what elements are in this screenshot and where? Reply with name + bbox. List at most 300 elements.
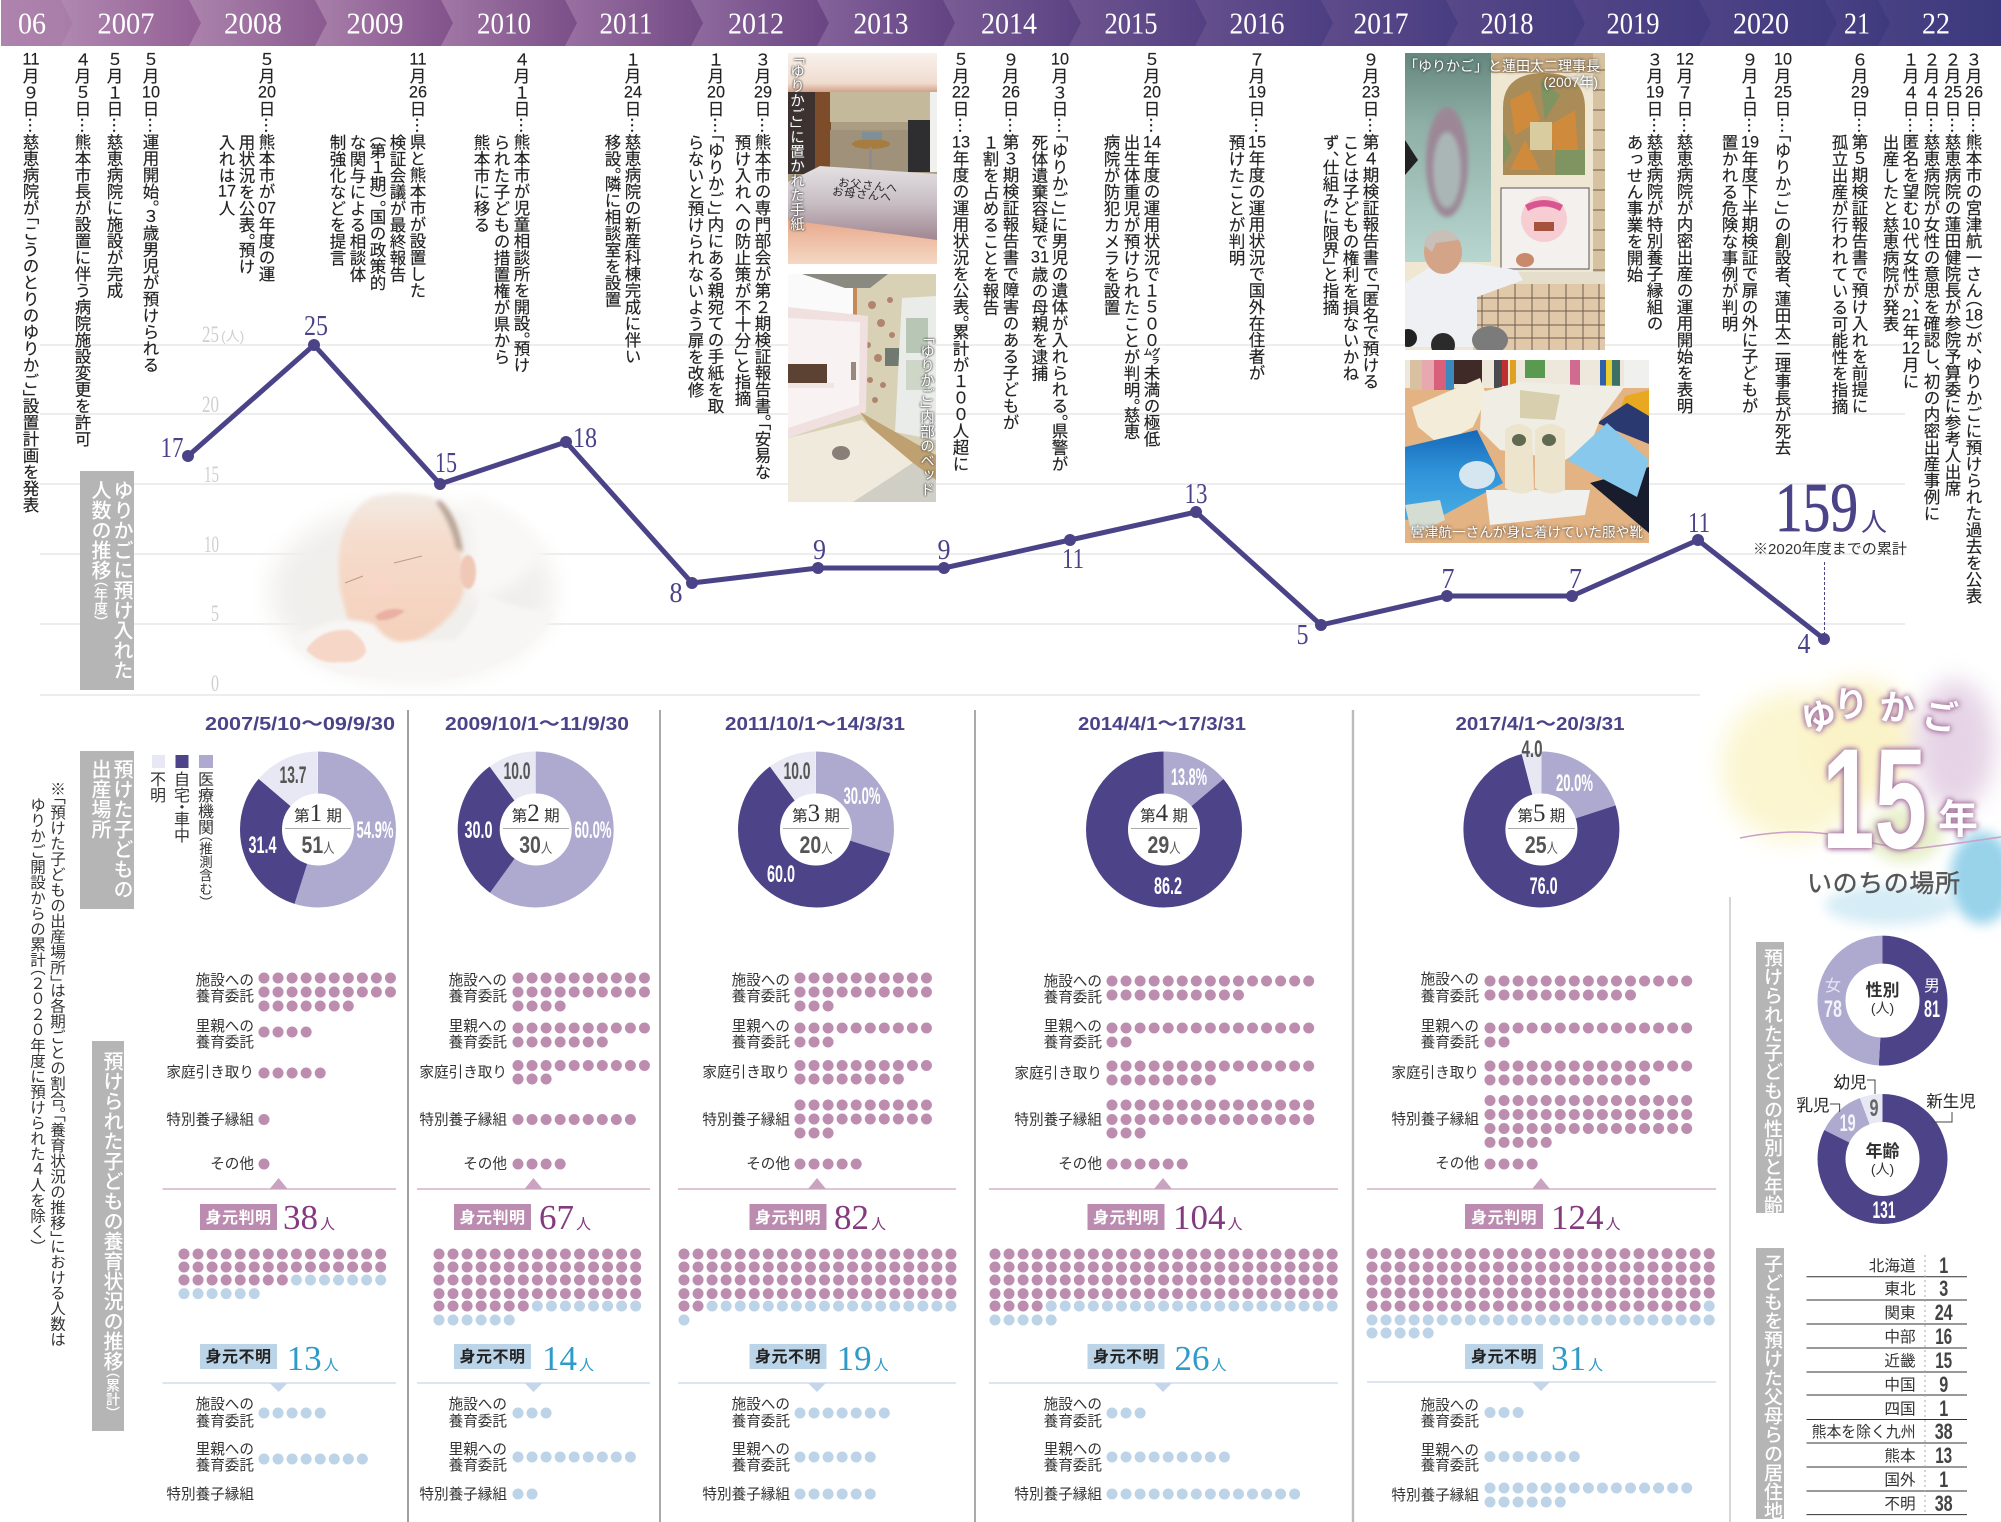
donut chart: sex of children: 78: [1824, 996, 1842, 1023]
timeline text: 2022 Mar 26: ３月 26 日…熊本市の宮津航一さん（ 18 ）が、ゆりかごに預けられた過去を公表: [1962, 51, 1986, 604]
dot rows: unidentified 14: 特別養子縁組: [419, 1486, 507, 1503]
timeline text: 2020 Sep 1: [1718, 51, 1762, 414]
timeline text: 2008 May 20: 用状況を公表。預け: [235, 134, 259, 274]
donut chart: sex of children: 81: [1924, 996, 1940, 1023]
timeline text: 2011 Jan 24: 移設。隣に相談室を設置: [601, 134, 625, 307]
unidentified banner: 14人: [542, 1339, 594, 1378]
data line: [188, 345, 1824, 639]
subtitle: いのちの場所: [1807, 870, 1960, 898]
unidentified banner: 身元不明: [1471, 1348, 1537, 1366]
table: residence of parents: 24: [1935, 1300, 1953, 1325]
identified banner: 124人: [1551, 1198, 1621, 1237]
donut chart: birthplace period 1: 54.9%: [356, 817, 394, 844]
table: residence of parents: 3: [1939, 1276, 1948, 1301]
dot rows: identified 67: 特別養子縁組: [419, 1112, 507, 1128]
timeline text: 2014 Oct 3: 死体遺棄容疑で 31 歳の母親を逮捕: [1028, 134, 1052, 381]
dot rows: identified 104: 施設への: [1044, 974, 1102, 990]
dot rows: unidentified 13: 里親への: [196, 1442, 254, 1458]
watercolour background of title: [1721, 680, 2001, 925]
section tag: sex and age: 預けられた子どもの性別と年齢: [1760, 948, 1787, 1214]
dot rows: unidentified 13: [166, 1396, 363, 1503]
dot rows: unidentified 14: 養育委託: [449, 1457, 507, 1474]
dot rows: unidentified 31: 里親への: [1421, 1443, 1479, 1459]
data labels: 11: [1688, 507, 1710, 539]
section tag: birthplace: [80, 751, 134, 909]
timeline year ribbon: 2009: [346, 6, 404, 40]
table: residence of parents: 38: [1935, 1491, 1953, 1516]
dot rows: identified 124: 里親への: [1421, 1019, 1479, 1035]
unidentified banner: 身元不明: [1093, 1348, 1159, 1366]
photo: letter placed in the cradle: [788, 53, 937, 264]
donut chart: birthplace period 1: 13.7: [280, 762, 306, 789]
timeline text: 2019 Mar 19: ３月 19 日…慈恵病院が特別養子縁組の: [1643, 51, 1667, 332]
dot rows: identified 104: 養育委託: [1044, 989, 1102, 1006]
dot matrix: all children period 5: [1372, 1254, 1710, 1333]
dot rows: identified 67: その他: [463, 1156, 507, 1172]
dot rows: identified 124: 養育委託: [1421, 1034, 1479, 1051]
dot rows: unidentified 13: 施設への: [196, 1397, 254, 1413]
dot rows: identified 38: 養育委託: [196, 988, 254, 1005]
dot rows: identified 67: 養育委託: [449, 1034, 507, 1051]
donut chart: birthplace period 1: 第1 期: [294, 800, 342, 827]
donut chart: birthplace period 5: 25人: [1525, 832, 1558, 859]
title: 15 years of the cradle: か: [1879, 689, 1915, 728]
timeline text: 2019 Mar 19: あっせん事業を開始: [1623, 134, 1647, 282]
donut chart: birthplace period 3: 10.0: [784, 758, 810, 785]
timeline text: 2021 Jun 29: ６月 29 日…第５期検証報告書で預け入れを前提に: [1848, 51, 1872, 414]
footnote: ※「預けた子どもの出産場所」は各期ごとの割合。「養育状況の推移」における人数は: [47, 781, 69, 1347]
timeline text: 2015 May 20: [1100, 51, 1164, 447]
legend swatches: [152, 755, 213, 768]
legend: unknown: 不明: [146, 771, 170, 803]
donut chart: age of children: 9: [1870, 1095, 1878, 1122]
timeline text: 2022 Jan 4: [1879, 51, 1923, 389]
table: residence of parents: 1: [1939, 1396, 1948, 1421]
photo: clothes and shoes of Miyatsu Koichi: [1405, 360, 1649, 543]
section tag: number of children trend: ゆりかごに預け入れた: [109, 480, 138, 680]
timeline text: 2022 Feb 4: ２月４日…慈恵病院が女性の意思を確認し、初の内密出産事例に: [1920, 51, 1944, 521]
y axis labels: 0: [211, 671, 219, 696]
identified banner: 82人: [834, 1198, 886, 1237]
donut chart: age of children: 131: [1872, 1197, 1896, 1224]
dot rows: identified 82: 施設への: [732, 973, 790, 989]
period 1 column: [162, 714, 396, 1503]
period 2 column: [417, 714, 650, 1503]
dot rows: unidentified 14: [419, 1396, 631, 1503]
unidentified banner: 身元不明: [205, 1348, 272, 1366]
title: 15 years of the cradle: ご: [1920, 696, 1960, 739]
line chart: number of children per year: [160, 310, 1830, 696]
donut chart: sex of children: 性別: [1866, 981, 1900, 1000]
timeline text: 2021 Jun 29: [1828, 51, 1872, 414]
data labels: 9: [813, 534, 826, 566]
data labels: 8: [670, 577, 682, 609]
dot rows: unidentified 14: 里親への: [449, 1442, 507, 1458]
timeline year ribbon: 2017: [1354, 6, 1408, 40]
donut chart: age of children: [1796, 1073, 1976, 1224]
timeline text: 2016 Jul 19: [1225, 51, 1269, 381]
donut chart: birthplace period 4: 29人: [1148, 832, 1180, 859]
period 3 column: [678, 714, 956, 1503]
title: 15 years of the cradle: 年: [1938, 798, 1978, 842]
identified banner: [417, 1178, 650, 1237]
data labels: 4: [1798, 628, 1811, 660]
data labels: 7: [1569, 563, 1582, 595]
donut chart: age of children: (人): [1871, 1161, 1894, 1177]
dot rows: identified 38: その他: [210, 1156, 254, 1172]
timeline text: 2014 May 22: ５月 22 日… 13 年度の運用状況を公表。累計が１００人超に: [949, 51, 973, 472]
dot rows: unidentified 31: 養育委託: [1421, 1413, 1479, 1430]
dot rows: unidentified 13: 養育委託: [196, 1413, 254, 1430]
donut chart: sex of children: 男: [1924, 978, 1940, 995]
timeline text: 2014 Sep 26: [979, 51, 1023, 430]
unidentified banner: 身元不明: [755, 1348, 821, 1366]
dot matrix: all children period 3: [684, 1254, 951, 1320]
dot rows: unidentified 31: 施設への: [1421, 1398, 1479, 1414]
dot rows: identified 124: 養育委託: [1421, 988, 1479, 1005]
dot rows: unidentified 31: 特別養子縁組: [1391, 1487, 1479, 1504]
period dates: 2009/10/1～11/9/30: [445, 714, 629, 734]
donut chart: birthplace period 4: 13.8%: [1171, 764, 1207, 791]
timeline text: 2011 Jan 24: [601, 51, 645, 364]
dot rows: identified 67: 養育委託: [449, 988, 507, 1005]
dot rows: unidentified 26: 施設への: [1044, 1397, 1102, 1413]
dot rows: identified 124: 施設への: [1421, 972, 1479, 988]
dot rows: identified 104: その他: [1058, 1156, 1102, 1172]
timeline text: 2012 Jan 20: １月 20 日…「ゆりかご」内にある親宛ての手紙を取: [704, 51, 728, 414]
unidentified banner: [989, 1339, 1338, 1392]
donut chart: birthplace period 5: 76.0: [1530, 873, 1558, 900]
timeline year ribbon: 2011: [600, 6, 652, 40]
dot rows: identified 104: [1014, 973, 1309, 1172]
timeline text: 2022 Feb 25: ２月 25 日…慈恵病院の蓮田健院長が参院予算委に参考人出席: [1941, 51, 1965, 496]
dot rows: identified 124: その他: [1435, 1155, 1479, 1172]
timeline text: 2012 Jan 20: [684, 51, 728, 414]
dot rows: identified 38: 施設への: [196, 973, 254, 989]
timeline text: 2010 Apr 1: [470, 51, 534, 373]
identified banner: 身元判明: [1093, 1209, 1159, 1227]
timeline text: 2017 Sep 23: ことは子どもの権利を損ないかね: [1339, 134, 1363, 381]
donut chart: age of children: 新生児: [1926, 1092, 1976, 1111]
donut chart: birthplace period 3: 第3 期: [792, 800, 840, 827]
data labels: 25: [304, 310, 328, 342]
dot rows: identified 104: 家庭引き取り: [1014, 1065, 1102, 1082]
timeline text: 2021 Jun 29: 孤立出産が行われている可能性を指摘: [1828, 134, 1852, 414]
timeline text: 2017 Sep 23: ９月 23 日…第４期検証報告書で「匿名で預ける: [1359, 51, 1383, 389]
dot rows: identified 38: 家庭引き取り: [166, 1064, 254, 1081]
donut chart: birthplace period 2: 60.0%: [574, 817, 612, 844]
dot rows: identified 38: 里親への: [196, 1019, 254, 1035]
dot rows: identified 67: 施設への: [449, 973, 507, 989]
table: residence of parents: 38: [1935, 1419, 1953, 1444]
timeline text: 2022 Jan 4: 出産したと慈恵病院が発表: [1879, 134, 1903, 332]
dot rows: identified 104: 養育委託: [1044, 1034, 1102, 1051]
donut chart: sex of children: 女: [1825, 977, 1841, 995]
timeline text: 2008 May 20: ５月 20 日…熊本市が 07 年度の運: [255, 51, 279, 282]
timeline text: 2009 Nov 26: 検証会議が最終報告: [386, 134, 410, 282]
table: residence of parents: 東北: [1884, 1280, 1916, 1298]
data labels: 7: [1442, 563, 1454, 595]
timeline year ribbon: 2010: [477, 6, 531, 40]
table: residence of parents: 熊本: [1884, 1447, 1916, 1465]
table: residence of parents: 関東: [1884, 1304, 1916, 1322]
title: 15 years of the cradle: り: [1833, 686, 1869, 725]
table: residence of parents: 16: [1935, 1324, 1952, 1349]
section tag: number of children trend: 人数の推移 （年度）: [87, 480, 116, 622]
donut chart: birthplace period 2: 30人: [519, 832, 552, 859]
donut chart: birthplace period 3: [759, 758, 880, 888]
timeline text: 2020 Sep 1: 置かれる危険な事例が判明: [1718, 134, 1742, 332]
period 4 column: [989, 714, 1338, 1503]
identified banner: [1367, 1178, 1716, 1237]
dot rows: identified 38: 養育委託: [196, 1034, 254, 1051]
table: residence of parents: 中国: [1884, 1376, 1916, 1394]
timeline text: 2014 Oct 3: 10 月３日…「ゆりかご」に男児の遺体が入れられる。県警が: [1048, 51, 1072, 472]
table: residence of parents: [1806, 1253, 1967, 1516]
timeline text: 2015 May 20: 出生体重児が預けられたことが判明。慈恵: [1120, 134, 1144, 439]
dot rows: identified 38: 特別養子縁組: [166, 1112, 254, 1128]
timeline text: 2009 Nov 26: 制強化などを提言: [326, 134, 350, 266]
table: residence of parents: 近畿: [1884, 1352, 1916, 1370]
timeline text: 2016 Jul 19: 預けたことが判明: [1225, 134, 1249, 266]
identified banner: [162, 1178, 396, 1237]
dot rows: unidentified 26: 里親への: [1044, 1442, 1102, 1458]
donut chart: age of children: 19: [1840, 1110, 1856, 1137]
legend: home or car: 自宅・車中: [170, 771, 194, 843]
identified banner: 67人: [539, 1198, 591, 1237]
y axis labels: 10: [204, 532, 219, 557]
timeline text: 2012 Mar 29: ３月 29 日…熊本市の専門部会が第２期検証報告書。「安易な: [751, 51, 775, 480]
donut chart: birthplace period 1: 31.4: [248, 832, 277, 859]
donut chart: sex of children: [1824, 950, 1940, 1052]
dot matrix: all children period 2: [439, 1254, 636, 1320]
donut chart: birthplace period 5: 4.0: [1522, 736, 1542, 763]
period 5 column: [1367, 714, 1716, 1504]
timeline text: 2010 Apr 1: 熊本市に移る: [470, 134, 494, 232]
timeline text: 2017 Sep 23: [1319, 51, 1383, 389]
dot rows: identified 67: [419, 972, 645, 1172]
table: residence of parents: 北海道: [1869, 1257, 1916, 1275]
identified banner: [989, 1178, 1338, 1237]
dot rows: unidentified 13: 特別養子縁組: [166, 1486, 254, 1503]
unidentified banner: 身元不明: [459, 1348, 526, 1366]
unidentified banner: 19人: [837, 1339, 889, 1378]
photo: sleeping baby: [270, 494, 555, 680]
data labels: 17: [160, 432, 184, 464]
donut chart: birthplace period 4: [1107, 764, 1221, 900]
timeline year ribbon: 2013: [854, 6, 908, 40]
timeline year ribbon: 2015: [1104, 6, 1158, 40]
identified banner: 身元判明: [459, 1209, 526, 1227]
table: residence of parents: 1: [1939, 1253, 1948, 1278]
table: residence of parents: 9: [1939, 1372, 1948, 1397]
timeline year ribbon: 2018: [1480, 6, 1534, 40]
dot rows: identified 82: 養育委託: [732, 1034, 790, 1051]
cumulative total callout: 159 people: ※2020年度までの累計: [1753, 541, 1908, 558]
dot rows: identified 124: 特別養子縁組: [1391, 1111, 1479, 1128]
timeline text: 2010 Apr 1: られた子どもの措置権が県から: [490, 134, 514, 364]
table: residence of parents: 不明: [1884, 1496, 1916, 1513]
unidentified banner: [162, 1339, 396, 1392]
donut chart: birthplace period 1: [248, 762, 394, 886]
cumulative total callout: 159 people: 人: [1861, 507, 1887, 537]
timeline text: 2009 Nov 26: な関与による相談体: [346, 134, 370, 282]
data labels: 13: [1184, 478, 1208, 510]
dot rows: identified 82: 養育委託: [732, 988, 790, 1005]
photo: inside the cradle, bed: [788, 274, 936, 502]
data labels: [160, 310, 1811, 660]
donut chart: birthplace period 5: 20.0%: [1556, 770, 1593, 797]
table: residence of parents: 中部: [1884, 1328, 1916, 1346]
period dates: 2011/10/1～14/3/31: [725, 714, 905, 734]
timeline text: 2012 Mar 29: [731, 51, 775, 480]
y axis labels: 25: [202, 322, 219, 347]
timeline year ribbon: 2016: [1230, 6, 1284, 40]
y axis labels: [202, 322, 244, 696]
donut chart: birthplace period 2: 30.0: [464, 817, 492, 844]
dot rows: identified 124: 家庭引き取り: [1391, 1064, 1479, 1082]
timeline text: 2016 Jul 19: ７月 19 日… 15 年度の運用状況で国外在住者が: [1245, 51, 1269, 381]
timeline text: 2010 Apr 1: ４月１日…熊本市が児童相談所を開設。預け: [510, 51, 534, 373]
timeline text: 2012 Jan 20: らないと預けられないよう扉を改修: [684, 134, 708, 398]
dot rows: identified 104: 里親への: [1044, 1019, 1102, 1035]
section tag: parents residence: 子どもを預けた父母らの居住地: [1760, 1254, 1787, 1520]
donut chart: birthplace period 2: [464, 758, 612, 886]
dot rows: identified 67: 家庭引き取り: [419, 1064, 507, 1081]
timeline text: 2014 Sep 26: ９月 26 日…第３期検証報告書で障害のある子どもが: [999, 51, 1023, 430]
timeline year ribbon: 2020: [1733, 6, 1789, 40]
donut chart: age of children: 乳児: [1796, 1096, 1830, 1115]
donut chart: birthplace period 4: 第4 期: [1140, 800, 1188, 827]
cumulative total callout: 159 people: 159: [1775, 470, 1858, 547]
data points: [182, 339, 1830, 645]
unidentified banner: [1367, 1339, 1716, 1391]
photo caption: bed: 「ゆりかご」内部のベッド: [917, 337, 938, 496]
dot rows: unidentified 19: 特別養子縁組: [702, 1486, 790, 1503]
donut chart: age of children: 幼児: [1834, 1073, 1866, 1092]
dot rows: identified 82: [702, 972, 927, 1172]
timeline text: 2008 May 20: 入れは 17 人: [215, 134, 239, 216]
data labels: 5: [1296, 619, 1308, 651]
dot rows: identified 82: 家庭引き取り: [702, 1064, 790, 1081]
dot rows: unidentified 19: [702, 1396, 885, 1503]
timeline year ribbon: 06: [18, 6, 46, 40]
dot rows: unidentified 14: 養育委託: [449, 1413, 507, 1430]
timeline text: 2014 Sep 26: １割を占めることを報告: [979, 134, 1003, 315]
timeline text: 2008 May 20: [215, 51, 279, 282]
donut chart: birthplace period 5: 第5 期: [1517, 800, 1565, 827]
section tag: care status trend: 預けられた子どもの養育状況の推移 （累計）: [99, 1051, 128, 1413]
data labels: 15: [435, 447, 457, 479]
identified banner: 身元判明: [755, 1209, 821, 1227]
dot rows: identified 38: [166, 972, 391, 1172]
dot rows: unidentified 26: 特別養子縁組: [1014, 1486, 1102, 1503]
photo: Hasuda chairman at the cradle door: [1399, 53, 1605, 357]
dot rows: unidentified 19: 養育委託: [732, 1457, 790, 1474]
timeline text: 2015 May 20: 病院が防犯カメラを設置: [1100, 134, 1124, 315]
photo: letter placed in the cradle: お母さんへ: [832, 185, 893, 204]
y axis labels: (人): [221, 328, 244, 344]
timeline text: 2017 Sep 23: ず、仕組みに限界」と指摘: [1319, 134, 1343, 315]
y axis labels: 5: [211, 601, 219, 626]
section tag: birthplace: 預けた子どもの: [109, 759, 138, 899]
period dates: 2014/4/1～17/3/31: [1078, 714, 1246, 734]
table: residence of parents: 熊本を除く九州: [1812, 1423, 1916, 1441]
dot rows: unidentified 31: 養育委託: [1421, 1457, 1479, 1474]
y axis labels: 15: [204, 462, 219, 487]
photo caption: 「ゆりかご」と蓮田太二理事長: [1404, 58, 1600, 74]
timeline text: 2019 Dec 7: 12 月７日…慈恵病院が内密出産の運用開始を表明: [1673, 51, 1697, 414]
footnote: ゆりかご開設からの累計（２０２０年度に預けられた４人を除く）: [27, 796, 49, 1246]
unidentified banner: 13人: [287, 1339, 339, 1378]
timeline text: 2022 Jan 4: １月４日…匿名を望む 10 代女性が、 21 年 12 月に: [1899, 51, 1923, 389]
timeline text: 2009 Nov 26: [326, 51, 430, 298]
timeline text: 2011 Jan 24: １月 24 日…慈恵病院の新産科棟完成に伴い: [621, 51, 645, 364]
section tag: birthplace: 出産場所: [87, 759, 116, 839]
identified banner: 身元判明: [205, 1209, 272, 1227]
timeline text: 2012 Mar 29: 預け入れへの防止策が不十分」と指摘: [731, 134, 755, 406]
timeline year ribbon: 2012: [728, 6, 784, 40]
unidentified banner: [417, 1339, 650, 1392]
section tag: number of children trend: [80, 471, 134, 690]
dot matrix: all children period 1: [184, 1254, 381, 1294]
timeline year ribbon: 22: [1922, 6, 1950, 40]
timeline text: 2009 Nov 26: （第１期）。国の政策的: [366, 134, 390, 290]
identified banner: 身元判明: [1471, 1209, 1537, 1227]
donut chart: birthplace period 1: 51人: [302, 832, 335, 859]
title: 15 years of the cradle: ゆ: [1798, 695, 1840, 740]
dot rows: unidentified 14: 施設への: [449, 1397, 507, 1413]
unidentified banner: [678, 1339, 956, 1392]
dot rows: unidentified 31: [1391, 1397, 1687, 1504]
timeline text: 2007 May 10: ５月 10 日…運用開始。３歳男児が預けられる: [139, 51, 163, 373]
photo caption: 宮津航一さんが身に着けていた服や靴: [1411, 524, 1643, 540]
table: residence of parents: 13: [1935, 1443, 1952, 1468]
dot rows: unidentified 26: 養育委託: [1044, 1457, 1102, 1474]
period column dividers: [408, 710, 1730, 1522]
timeline text: 2009 Nov 26: 11 月 26 日…県と熊本市が設置した: [406, 51, 430, 298]
identified banner: 38人: [283, 1198, 335, 1237]
table: residence of parents: 四国: [1884, 1401, 1916, 1418]
donut chart: birthplace period 2: 第2 期: [512, 800, 560, 827]
photo caption: (2007年): [1544, 74, 1598, 90]
donut chart: birthplace period 3: 20人: [800, 832, 832, 859]
timeline year ribbon: 2019: [1606, 6, 1660, 40]
table: residence of parents: 15: [1935, 1348, 1952, 1373]
period dates: 2017/4/1～20/3/31: [1456, 714, 1624, 734]
unidentified banner: 26人: [1174, 1339, 1227, 1378]
data labels: 18: [573, 422, 597, 454]
dot rows: identified 124: [1391, 971, 1687, 1172]
y axis labels: 20: [202, 392, 219, 417]
timeline text: 2007 Apr 5: ４月５日…熊本市長が設置に伴う病院施設変更を許可: [71, 51, 95, 447]
cumulative total callout: 159 people: [1753, 470, 1908, 639]
data labels: 9: [938, 534, 950, 566]
dot matrix: all children period 4: [995, 1254, 1333, 1320]
dot rows: identified 82: 特別養子縁組: [702, 1112, 790, 1128]
period dates: 2007/5/10～09/9/30: [205, 714, 395, 734]
timeline text: 2006 Nov 9: 11 月９日…慈恵病院が「こうのとりのゆりかご」設置計画を発表: [19, 51, 43, 513]
donut chart: birthplace period 3: 60.0: [767, 861, 795, 888]
donut chart: age of children: 年齢: [1866, 1141, 1900, 1161]
gridlines: [40, 345, 1905, 695]
title: 15 years of the cradle: 15: [1822, 720, 1927, 879]
unidentified banner: 31人: [1551, 1339, 1603, 1378]
dot rows: unidentified 19: 施設への: [732, 1397, 790, 1413]
timeline text: 2007 May 1: ５月１日…慈恵病院に施設が完成: [103, 51, 127, 298]
photo caption: letter: 「ゆりかご」に置かれた手紙: [787, 57, 808, 231]
donut chart: birthplace period 5: [1484, 736, 1598, 900]
